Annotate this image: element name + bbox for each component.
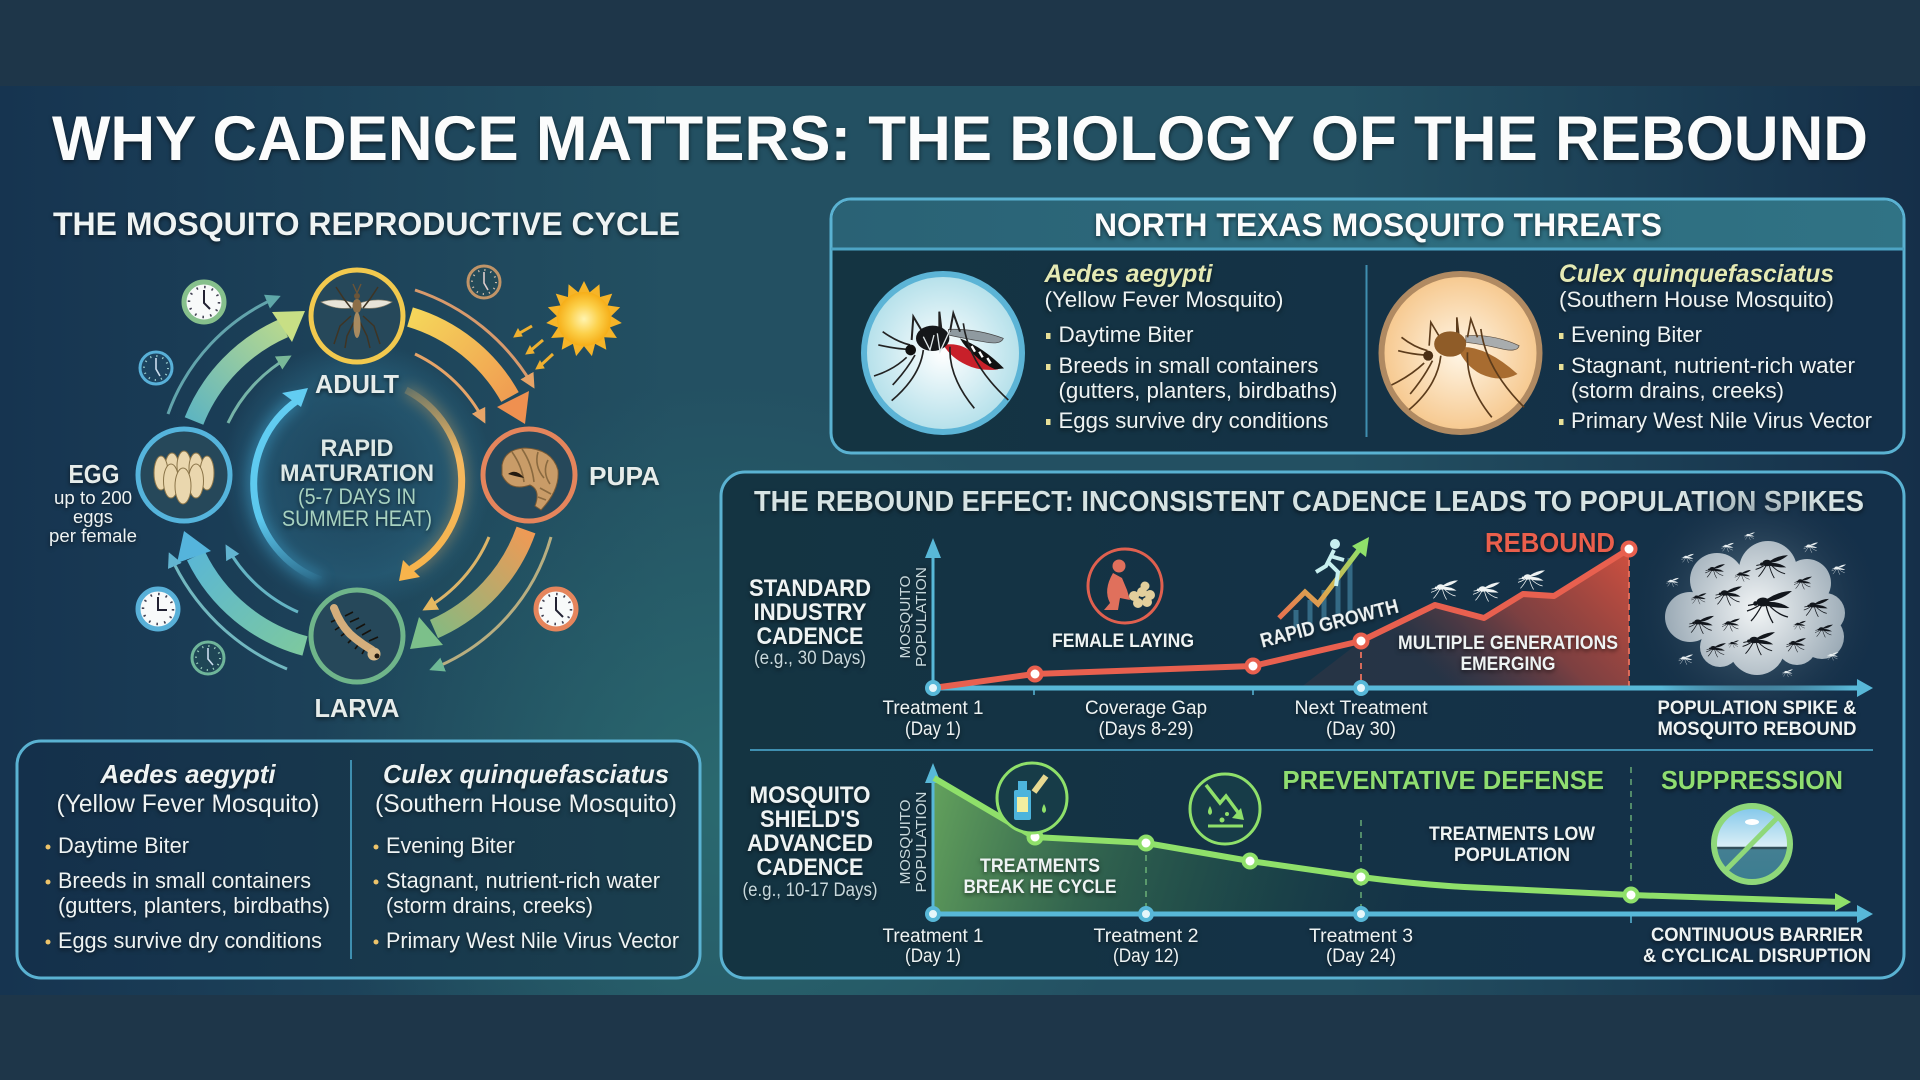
icon: spray treatment — [997, 763, 1067, 833]
red population line — [933, 549, 1629, 688]
column: aedes aegypti: Eggs survive dry conditions — [58, 928, 322, 953]
icon: declining population — [1190, 774, 1260, 844]
axis labels: standard cadence timeline: Next Treatment — [1294, 698, 1428, 719]
label: treatments break the cycle: TREATMENTS — [980, 856, 1100, 877]
green population line — [934, 778, 1851, 911]
axis label: mosquito population: POPULATION — [913, 567, 930, 667]
label: female laying: FEMALE LAYING — [1052, 631, 1194, 652]
axis label: mosquito population: MOSQUITO — [897, 576, 914, 658]
column: culex quinquefasciatus — [374, 759, 679, 953]
row label: mosquito shield's advanced cadence: MOSQUITO — [750, 782, 870, 809]
axis label: mosquito population — [897, 792, 930, 892]
axis labels: standard cadence timeline — [882, 698, 1428, 740]
axis labels: standard cadence timeline: (Day 30) — [1326, 719, 1396, 740]
stage: adult — [311, 270, 403, 399]
icon: adult mosquito — [321, 284, 392, 348]
text: culex quinquefasciatus threats: Primary West Nile Virus Vector — [1571, 408, 1872, 433]
label: population spike: MOSQUITO REBOUND — [1658, 719, 1856, 740]
chart: advanced cadence suppression — [925, 763, 1873, 923]
label: population spike — [1658, 698, 1857, 740]
axis label: mosquito population: MOSQUITO — [897, 800, 914, 884]
text: culex quinquefasciatus threats: Culex quinquefasciatus — [1559, 260, 1834, 288]
icon: aedes aegypti mosquito — [864, 274, 1022, 432]
arrow: pupa to larva — [410, 530, 526, 649]
icon: small mosquitoes — [1431, 570, 1545, 602]
label: treatments low population: POPULATION — [1454, 845, 1570, 866]
column: culex quinquefasciatus: Stagnant, nutrient-rich water — [386, 868, 660, 893]
label: treatments break the cycle: BREAK HE CYCLE — [964, 877, 1116, 898]
arrow: larva to egg — [177, 531, 305, 646]
icon: mosquito swarm cloud — [1632, 482, 1882, 732]
row label: mosquito shield's advanced cadence: (e.g., 10-17 Days) — [742, 880, 878, 901]
title: WHY CADENCE MATTERS: THE BIOLOGY OF THE REBOUND — [52, 104, 1868, 174]
axes — [925, 538, 1873, 697]
column: aedes aegypti — [46, 759, 330, 953]
label: treatments break the cycle — [964, 856, 1116, 898]
data markers — [1028, 830, 1638, 902]
icon: clock orange — [536, 589, 576, 629]
icon: eggs — [154, 451, 214, 504]
text: aedes aegypti threats: Breeds in small containers — [1058, 353, 1318, 378]
axis labels: advanced cadence timeline: Treatment 1 — [882, 926, 984, 947]
panel: rebound effect — [721, 472, 1904, 978]
icon: larva — [331, 608, 380, 660]
arrow: adult to pupa — [410, 317, 529, 424]
text: aedes aegypti threats: Eggs survive dry conditions — [1058, 408, 1328, 433]
row label: mosquito shield's advanced cadence — [742, 782, 878, 901]
text: culex quinquefasciatus threats: Evening Biter — [1571, 322, 1702, 347]
axis labels: advanced cadence timeline: Treatment 2 — [1094, 926, 1198, 947]
row label: standard industry cadence: INDUSTRY — [754, 599, 866, 626]
label: population spike: POPULATION SPIKE & — [1658, 698, 1857, 719]
section: mosquito reproductive cycle — [49, 206, 680, 723]
panel heading: THE REBOUND EFFECT: INCONSISTENT CADENCE LEADS TO POPULATION SPIKES — [754, 486, 1864, 518]
axis labels: advanced cadence timeline: (Day 24) — [1326, 946, 1396, 967]
icon: clock blue white — [138, 589, 178, 629]
arrow: egg to adult — [194, 311, 305, 421]
text: culex quinquefasciatus threats: Stagnant, nutrient-rich water — [1571, 353, 1855, 378]
label: treatments low population — [1429, 824, 1595, 866]
label: suppression: SUPPRESSION — [1661, 765, 1843, 795]
row label: mosquito shield's advanced cadence: SHIELD'S — [760, 806, 860, 833]
label: pupa: PUPA — [589, 461, 660, 491]
label: multiple generations emerging: EMERGING — [1460, 654, 1556, 675]
axis labels: advanced cadence timeline: (Day 1) — [905, 946, 961, 967]
icon: clock green — [184, 282, 224, 322]
treatment markers — [927, 908, 1367, 920]
label: multiple generations emerging: MULTIPLE GENERATIONS — [1398, 633, 1618, 654]
label: larva: LARVA — [314, 693, 400, 723]
column: aedes aegypti: Breeds in small containers — [58, 868, 311, 893]
text: culex quinquefasciatus threats: (Southern House Mosquito) — [1559, 287, 1834, 312]
label: treatments low population: TREATMENTS LOW — [1429, 824, 1595, 845]
center text: rapid maturation: (5-7 DAYS IN — [298, 484, 416, 509]
label: egg: eggs — [73, 507, 113, 527]
panel heading: NORTH TEXAS MOSQUITO THREATS — [1094, 207, 1662, 243]
axis labels: advanced cadence timeline — [882, 926, 1413, 967]
axis labels: advanced cadence timeline: (Day 12) — [1113, 946, 1179, 967]
row label: mosquito shield's advanced cadence: ADVANCED — [747, 830, 873, 857]
column: culex quinquefasciatus: Culex quinquefasciatus — [383, 759, 669, 789]
label: egg: up to 200 — [54, 488, 132, 508]
axis labels: standard cadence timeline: (Days 8-29) — [1098, 719, 1194, 740]
inner rapid maturation arrows — [254, 388, 462, 581]
axis labels: standard cadence timeline: Treatment 1 — [882, 698, 984, 719]
axis labels: advanced cadence timeline: Treatment 3 — [1309, 926, 1413, 947]
center text: rapid maturation — [280, 435, 434, 531]
panel: species summary — [17, 741, 700, 978]
icon: suppressed water — [1712, 804, 1792, 884]
axis labels: standard cadence timeline: (Day 1) — [905, 719, 961, 740]
text: aedes aegypti threats — [1044, 260, 1338, 433]
label: preventative defense: PREVENTATIVE DEFENSE — [1282, 765, 1604, 795]
label: continuous barrier: CONTINUOUS BARRIER — [1651, 925, 1863, 946]
icon: clock green dark — [192, 642, 224, 674]
data markers — [1028, 542, 1636, 680]
stage: larva — [311, 590, 403, 723]
column: culex quinquefasciatus: (Southern House Mosquito) — [375, 790, 677, 818]
row label: standard industry cadence: CADENCE — [756, 623, 864, 650]
label: egg: EGG — [68, 459, 120, 489]
cycle heading: THE MOSQUITO REPRODUCTIVE CYCLE — [53, 206, 680, 242]
icon: clock blue — [140, 352, 172, 384]
axes — [925, 763, 1873, 923]
label: continuous barrier — [1643, 925, 1871, 967]
text: aedes aegypti threats: (Yellow Fever Mosquito) — [1044, 287, 1284, 312]
center text: rapid maturation: SUMMER HEAT) — [282, 506, 432, 531]
row label: standard industry cadence: STANDARD — [749, 575, 871, 602]
label: continuous barrier: & CYCLICAL DISRUPTION — [1643, 946, 1871, 967]
column: aedes aegypti: (gutters, planters, birdbaths) — [58, 893, 330, 918]
center glow — [222, 341, 492, 611]
text: culex quinquefasciatus threats — [1559, 260, 1872, 433]
row label: standard industry cadence: (e.g., 30 Days) — [754, 648, 866, 669]
icon: clock brown — [468, 266, 500, 298]
axis label: mosquito population: POPULATION — [913, 792, 930, 892]
treatment markers — [927, 682, 1367, 694]
column: aedes aegypti: (Yellow Fever Mosquito) — [56, 790, 320, 818]
thin arrows around the cycle — [168, 290, 551, 669]
column: culex quinquefasciatus: Evening Biter — [386, 833, 515, 858]
column: culex quinquefasciatus: (storm drains, creeks) — [386, 893, 593, 918]
center text: rapid maturation: MATURATION — [280, 460, 434, 487]
chart: standard cadence rebound — [925, 538, 1873, 697]
label: adult: ADULT — [315, 369, 399, 399]
label: egg: per female — [49, 526, 137, 546]
icon: pupa — [502, 448, 558, 510]
column: culex quinquefasciatus: Primary West Nile Virus Vector — [386, 928, 679, 953]
column: aedes aegypti: Daytime Biter — [58, 833, 189, 858]
label: egg — [49, 459, 137, 546]
icon: female laying — [1088, 549, 1162, 623]
icon: rapid growth — [1279, 537, 1369, 628]
label: rapid growth: RAPID GROWTH — [1258, 596, 1401, 653]
axis label: mosquito population — [897, 567, 930, 667]
label: rebound: REBOUND — [1485, 527, 1615, 558]
text: aedes aegypti threats: Aedes aegypti — [1044, 260, 1214, 288]
label: multiple generations emerging — [1398, 633, 1618, 675]
text: culex quinquefasciatus threats: (storm drains, creeks) — [1571, 378, 1784, 403]
stage: pupa — [483, 429, 660, 521]
stage: egg — [49, 429, 230, 546]
center text: rapid maturation: RAPID — [320, 435, 394, 462]
column: aedes aegypti: Aedes aegypti — [100, 759, 276, 789]
text: aedes aegypti threats: (gutters, planters, birdbaths) — [1058, 378, 1338, 403]
icon: sun — [514, 281, 622, 369]
axis labels: standard cadence timeline: Coverage Gap — [1085, 698, 1207, 719]
row label: mosquito shield's advanced cadence: CADENCE — [756, 854, 864, 881]
panel: north texas mosquito threats — [831, 199, 1904, 453]
icon: culex quinquefasciatus mosquito — [1382, 274, 1540, 432]
row label: standard industry cadence — [749, 575, 871, 669]
text: aedes aegypti threats: Daytime Biter — [1058, 322, 1194, 347]
